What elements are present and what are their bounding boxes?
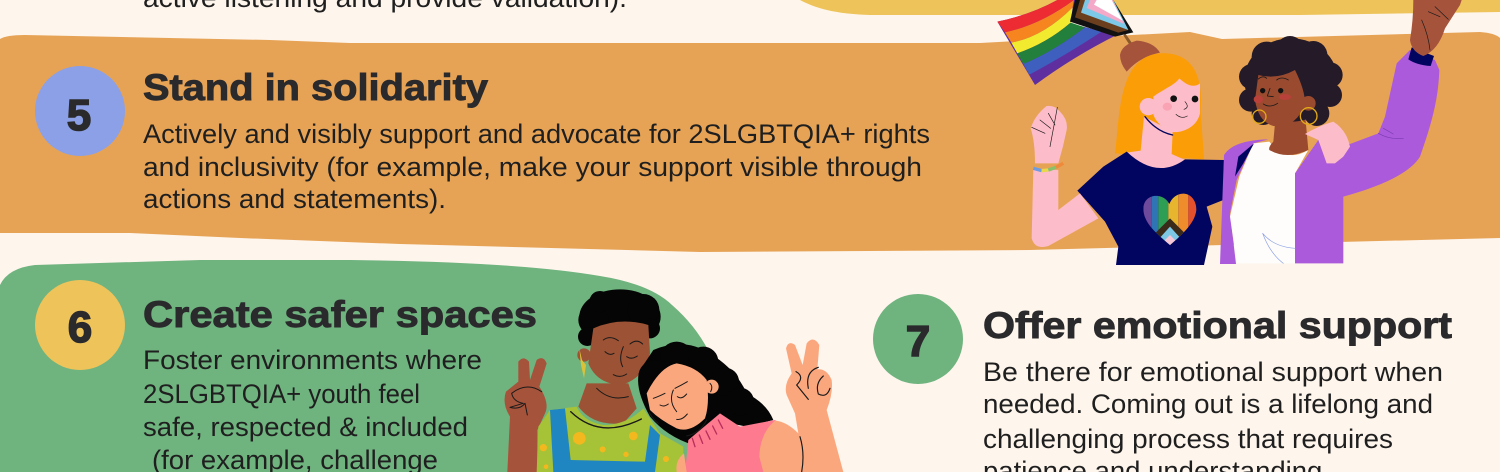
woman's face <box>647 363 708 430</box>
purple jacket, left side <box>1220 139 1268 264</box>
step 5 heading: Stand in solidarity <box>143 67 488 108</box>
panel: step 5 orange band <box>0 32 1500 252</box>
flag-holding hand <box>1120 41 1160 72</box>
fist <box>1031 106 1067 163</box>
hand on shoulder <box>1305 122 1350 163</box>
woman's pink top <box>685 413 803 472</box>
step 6 number badge: 6 <box>68 303 92 352</box>
step 7 number badge: 7 <box>906 317 930 366</box>
step 7 body text: Be there for emotional support when <box>983 357 1443 387</box>
illustration: two friends with pride flag <box>997 0 1462 265</box>
step 6 heading: Create safer spaces <box>143 294 537 335</box>
panel: step 6 green shape <box>0 260 730 472</box>
panel: step 7 <box>873 294 1452 472</box>
raised arm <box>1032 168 1098 247</box>
step 7 body text <box>983 357 1443 472</box>
blonde hair <box>1115 53 1204 159</box>
man's arm and peace hand <box>505 358 547 472</box>
woman's hair <box>638 342 773 445</box>
step 5 body text: and inclusivity (for example, make your support visible through <box>143 152 922 182</box>
lime shirt <box>537 407 683 472</box>
woman's shoulder and arm <box>759 340 843 472</box>
step 6 body text: 2SLGBTQIA+ youth feel <box>143 379 420 409</box>
step 6 body text <box>143 345 482 472</box>
step 7 number badge <box>873 294 963 384</box>
navy t-shirt <box>1077 152 1224 265</box>
illustration: two friends with peace signs <box>505 289 843 472</box>
neck <box>1269 113 1308 155</box>
rainbow bracelet <box>1033 163 1063 171</box>
neck <box>1127 117 1185 168</box>
step 7 heading: Offer emotional support <box>983 305 1452 346</box>
step 5 body text: actions and statements). <box>143 184 446 214</box>
step 5 body text: Actively and visibly support and advocate for 2SLGBTQIA+ rights <box>143 119 930 149</box>
blue overalls <box>550 408 660 472</box>
face <box>1153 78 1200 132</box>
white top <box>1230 142 1308 263</box>
step 7 body text: needed. Coming out is a lifelong and <box>983 389 1433 419</box>
icon: pride flag <box>997 0 1133 85</box>
man's neck <box>578 383 637 424</box>
curly hair <box>1239 36 1343 126</box>
step 5 body text <box>143 119 930 214</box>
raised hand <box>1410 0 1462 56</box>
yellow band at top right <box>800 0 1500 15</box>
man's face <box>588 322 650 385</box>
face <box>1255 70 1305 126</box>
step 6 body text: safe, respected & included <box>143 412 468 442</box>
purple jacket and raised arm <box>1295 50 1439 263</box>
step 6 body text: Foster environments where <box>143 345 482 375</box>
step 5 number badge: 5 <box>67 91 91 140</box>
step 6 number badge <box>35 280 125 370</box>
step 7 body text: challenging process that requires <box>983 424 1393 454</box>
sleeve cuff <box>1408 47 1434 66</box>
man's hair <box>578 289 661 346</box>
icon: rainbow heart on shirt <box>1143 194 1196 245</box>
step 5 number badge <box>35 66 125 156</box>
gold hoop earrings <box>1253 108 1317 124</box>
yellow shirt dots <box>540 432 669 469</box>
